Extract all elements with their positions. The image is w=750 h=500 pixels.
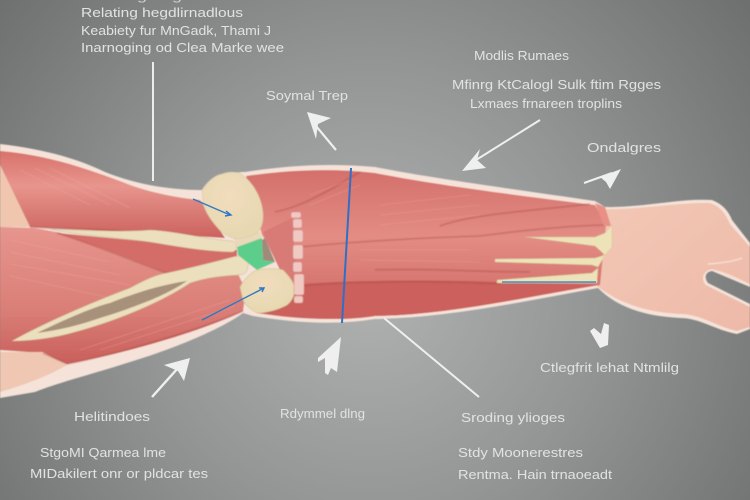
muscle: upper left [0,151,225,238]
text: top-left block: Relating hegdlirnadlous [81,5,244,20]
text: bottom-left block: MIDakilert onr or pldcar tes [30,466,209,481]
joint: green cartilage [237,238,275,270]
muscle: forearm lower band [262,281,598,319]
arrow: up-right wrist [584,169,621,189]
joint: pale ligament [233,232,262,247]
text: top-left block [81,0,284,55]
segmented band [291,212,304,303]
muscle: forearm [246,170,606,319]
muscle contour lines [30,172,605,364]
label: wrist bottom: Ctlegfrit lehat Ntmlilg [540,360,679,375]
wrist tendons [495,225,612,283]
hand [597,203,750,331]
blue arrow: upper knob [193,199,231,216]
joint: brown tissue [262,238,275,262]
label: top center: Soymal Trep [266,88,348,103]
arrow: long down-left [462,120,540,171]
text: bottom-right block: Rentma. Hain trnaoeadt [458,467,612,482]
muscle: inner fan [263,218,296,272]
arrow: up-left top [307,112,336,150]
text: bottom-right block: Stdy Moonerestres [458,445,584,460]
leader line: lower right [384,318,479,397]
muscle fibres [10,168,480,350]
blue line: forearm measure [342,168,351,323]
label: bottom center: Rdymmel dlng [280,406,365,421]
text: bottom-left block [30,409,209,481]
skin: lower left patch [0,352,67,392]
text: top-right block: Modlis Rumaes [474,48,570,63]
text: top-right block: Mfinrg KtCalogl Sulk ftim Rgges [452,77,662,92]
leader line: top [152,62,154,181]
long bone [12,256,248,341]
lower knob [240,268,295,313]
arrow: chevron down [590,323,609,348]
text: bottom-right block: Sroding ylioges [461,410,566,425]
text: bottom-left block: StgoMI Qarmea lme [40,445,166,460]
finger creases [708,258,750,285]
text: top-left block: Keabiety fur MnGadk, Thami J [81,23,271,38]
text: top-right block [452,48,662,111]
thin bone [50,229,236,252]
blue line: wrist [502,281,596,283]
label: wrist top: Ondalgres [587,140,662,155]
arrow: up-right lower left [152,358,190,397]
text: top-right block: Lxmaes frnareen troplins [470,96,623,111]
wrist cuff [595,203,611,226]
text: top-left block: Inarnoging od Clea Marke wee [81,40,284,55]
muscle: lower left [0,227,246,364]
bone cavity [37,281,187,333]
skin outline of arm [0,144,750,398]
text: bottom-left block: Helitindoes [74,409,151,424]
upper knob [202,172,263,238]
muscle: mid wedge [57,233,237,273]
arrow: up center [318,337,341,375]
skin: left shoulder patch [0,165,30,227]
arm illustration [0,144,750,398]
blue arrow: lower knob [202,288,264,320]
text: bottom-right block [458,410,612,482]
